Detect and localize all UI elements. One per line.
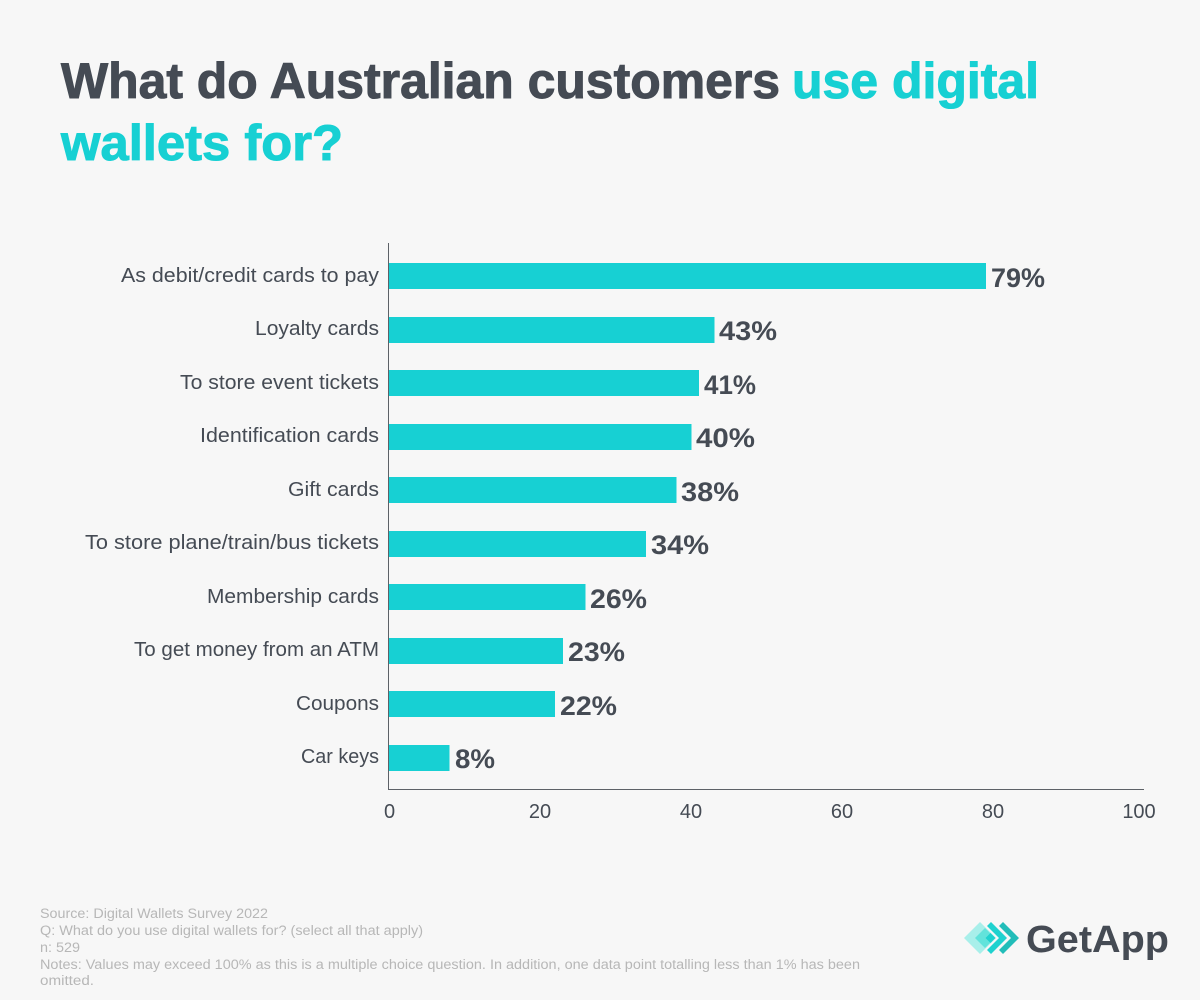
- value labels: 23%: [568, 637, 625, 667]
- logo wordmark: GetApp: [1026, 919, 1169, 961]
- category labels: Identification cards: [200, 425, 379, 447]
- value labels: 38%: [681, 477, 739, 507]
- source notes: Q: What do you use digital wallets for? (select all that apply): [40, 923, 423, 938]
- axis tick labels: 80: [982, 801, 1004, 823]
- bar chart: [85, 243, 1156, 823]
- value labels: 34%: [651, 530, 709, 560]
- value labels: 22%: [560, 691, 617, 721]
- category labels: To store plane/train/bus tickets: [85, 532, 379, 554]
- source notes: [40, 906, 860, 988]
- category labels: [85, 265, 379, 768]
- value labels: [455, 263, 1045, 774]
- value labels: 41%: [704, 370, 756, 400]
- source notes: Source: Digital Wallets Survey 2022: [40, 906, 268, 921]
- value labels: 79%: [991, 263, 1045, 293]
- axis tick labels: 60: [831, 801, 853, 823]
- value labels: 8%: [455, 744, 495, 774]
- axes: [388, 243, 1144, 790]
- axis tick labels: 40: [680, 801, 702, 823]
- category labels: Coupons: [296, 693, 379, 715]
- title: use digital: [792, 53, 1039, 109]
- category labels: As debit/credit cards to pay: [121, 265, 379, 287]
- category labels: To get money from an ATM: [134, 639, 379, 661]
- title: wallets for?: [60, 115, 343, 171]
- category labels: Gift cards: [288, 479, 379, 501]
- axis tick labels: 20: [529, 801, 551, 823]
- GetApp logo: [964, 919, 1169, 961]
- axis tick labels: 100: [1122, 801, 1156, 823]
- category labels: Loyalty cards: [255, 318, 379, 340]
- category labels: To store event tickets: [180, 372, 379, 394]
- title: [60, 53, 1039, 171]
- bars: [389, 263, 986, 771]
- icon: layered diamonds: [964, 922, 1019, 954]
- axis tick labels: [384, 801, 1156, 823]
- category labels: Car keys: [301, 746, 379, 768]
- axis tick labels: 0: [384, 801, 395, 823]
- source notes: omitted.: [40, 973, 94, 988]
- value labels: 43%: [719, 316, 777, 346]
- category labels: Membership cards: [207, 586, 379, 608]
- title: What do Australian customers: [61, 53, 780, 109]
- value labels: 40%: [696, 423, 755, 453]
- value labels: 26%: [590, 584, 647, 614]
- source notes: n: 529: [40, 940, 80, 955]
- source notes: Notes: Values may exceed 100% as this is a multiple choice question. In addition, one data point totalling less than 1% has been: [40, 957, 860, 972]
